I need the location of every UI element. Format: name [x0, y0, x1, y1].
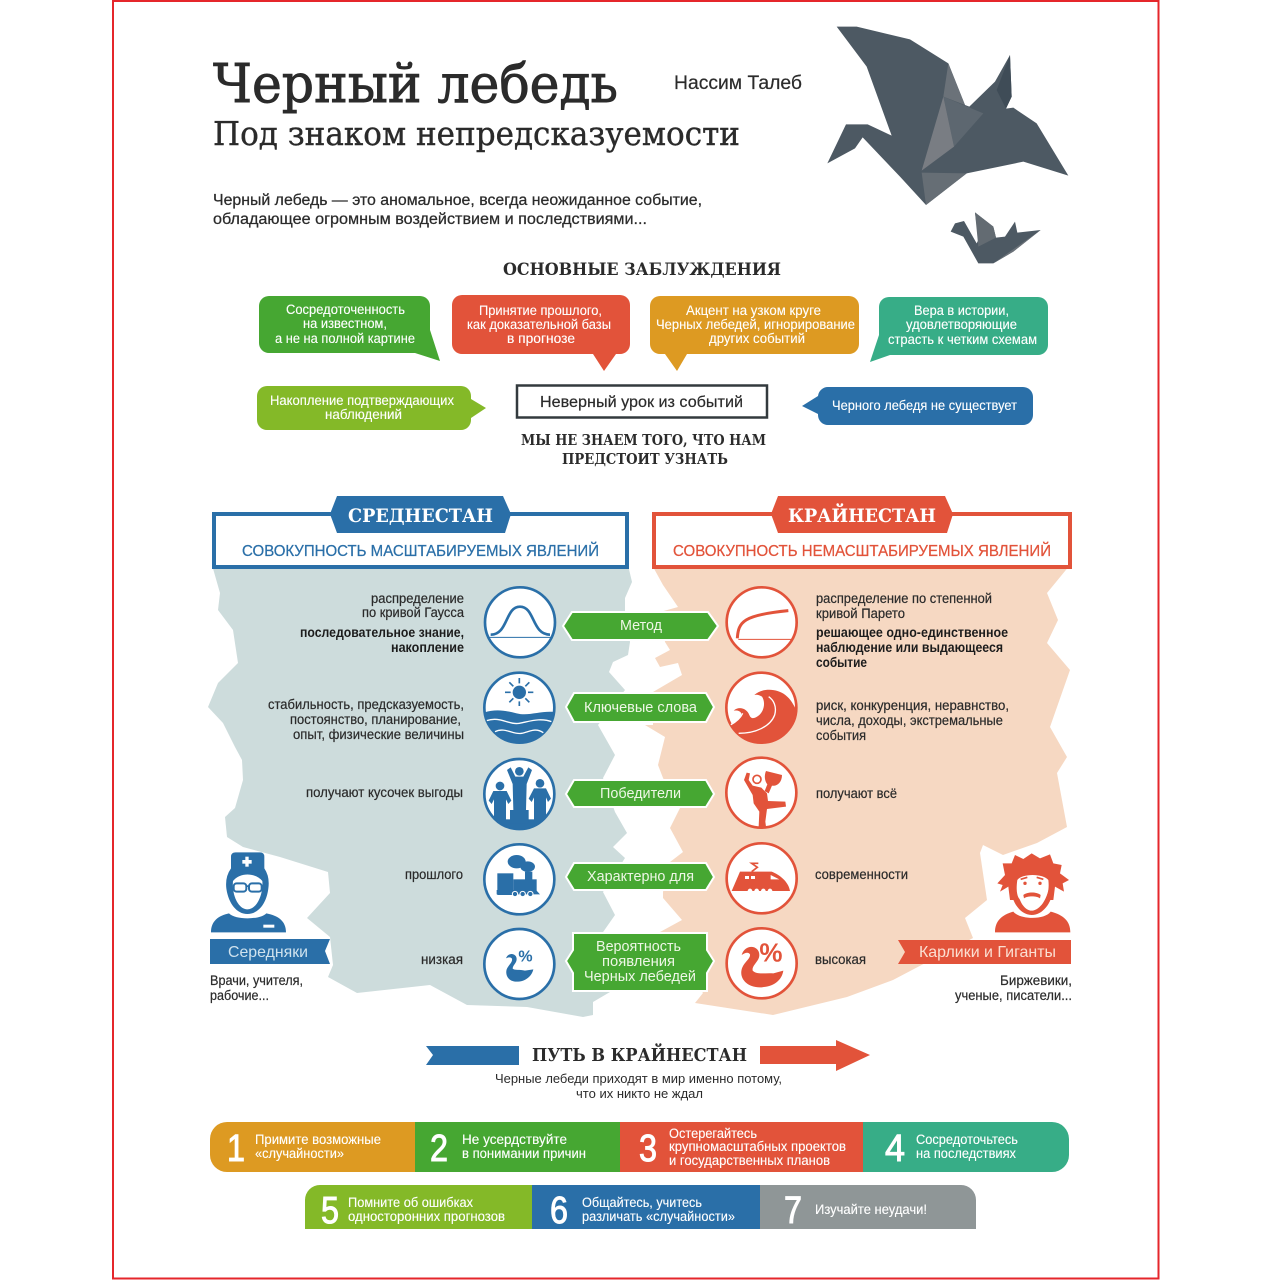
icon: steam locomotive: [484, 844, 554, 914]
callout: no black swan: Черного лебедя не существует: [832, 398, 1017, 413]
step 5: [321, 1190, 505, 1232]
bubble: known: а не на полной картине: [275, 331, 415, 346]
bubble: known: [259, 296, 440, 361]
icon: small swan percent: [484, 929, 554, 999]
callout: accumulation: наблюдений: [325, 407, 402, 422]
left column texts: по кривой Гаусса: [362, 605, 464, 620]
bubble: past: как доказательной базы: [467, 317, 611, 332]
right column texts: событие: [816, 655, 867, 670]
label: mediocre people: [210, 939, 330, 964]
left column texts: прошлого: [405, 867, 463, 882]
intro text: обладающее огромным воздействием и последствиями...: [213, 211, 647, 228]
bubble: stories: [870, 297, 1048, 362]
step 7: Изучайте неудачи!: [815, 1202, 927, 1217]
icon: big swan percent: [727, 928, 797, 998]
bubble: narrow circle: Акцент на узком круге: [686, 303, 821, 318]
step 5: 5: [321, 1190, 339, 1232]
step 1: Примите возможные: [255, 1132, 381, 1147]
step 2: Не усердствуйте: [462, 1132, 567, 1147]
bubble: past: Принятие прошлого,: [479, 303, 602, 318]
step 3: 3: [639, 1128, 657, 1170]
author: Нассим Талеб: [674, 73, 802, 94]
right column texts: числа, доходы, экстремальные: [816, 713, 1003, 728]
step 6: 6: [550, 1190, 568, 1232]
red icons: [722, 587, 799, 998]
panel header: Extremistan: СОВОКУПНОСТЬ НЕМАСШТАБИРУЕМЫХ ЯВЛЕНИЙ: [673, 542, 1051, 560]
title: Черный лебедь: [213, 54, 618, 115]
text: traders scientists: Биржевики,: [1000, 973, 1072, 988]
panel header: Extremistan: КРАЙНЕСТАН: [788, 503, 936, 527]
step 4: [885, 1128, 1018, 1170]
background blob: Mediocristan: [208, 565, 632, 1017]
intro text: Черный лебедь — это аномальное, всегда неожиданное событие,: [213, 192, 702, 209]
label: dwarfs and giants: [898, 940, 1071, 964]
path caption: что их никто не ждал: [576, 1086, 703, 1101]
callout: accumulation: Накопление подтверждающих: [270, 393, 454, 408]
title: [213, 54, 740, 153]
tag: keywords: [566, 693, 714, 722]
box: wrong lesson: Неверный урок из событий: [540, 394, 743, 411]
right column texts: наблюдение или выдающееся: [816, 640, 1003, 655]
icon: dancing winner with trophy: [726, 758, 796, 828]
tag: probability: [566, 933, 714, 991]
left column texts: распределение: [371, 591, 464, 606]
step 1: [227, 1128, 381, 1170]
icon: gauss curve: [485, 587, 555, 657]
icon: origami swans: [827, 27, 1068, 263]
bubble: stories: страсть к четким схемам: [888, 332, 1037, 347]
blue icons: [480, 587, 560, 999]
bubble: narrow circle: [650, 296, 859, 371]
icon: pareto curve: [727, 587, 797, 657]
tag: winners: Победители: [600, 785, 681, 802]
right column texts: события: [816, 728, 866, 743]
path caption: Черные лебеди приходят в мир именно потому,: [495, 1071, 782, 1086]
tag: keywords: Ключевые слова: [584, 699, 698, 716]
icon: big swan percent: %: [759, 938, 782, 968]
text: doctors teachers: рабочие...: [210, 988, 269, 1003]
icon: small swan percent: %: [518, 949, 533, 966]
bubble: known: Сосредоточенность: [286, 302, 405, 317]
right column texts: распределение по степенной: [816, 591, 992, 606]
step 4: Сосредоточьтесь: [916, 1132, 1018, 1147]
heading: path to Extremistan: ПУТЬ В КРАЙНЕСТАН: [532, 1042, 747, 1066]
box: wrong lesson: [517, 386, 767, 418]
panel header: Mediocristan: [214, 496, 627, 567]
step 3: [639, 1126, 846, 1170]
tag: probability: появления: [602, 953, 675, 970]
statement: ПРЕДСТОИТ УЗНАТЬ: [562, 451, 728, 468]
step 7: 7: [784, 1190, 802, 1232]
text: traders scientists: ученые, писатели...: [955, 988, 1072, 1003]
step 3: и государственных планов: [669, 1153, 830, 1168]
steps row 1: [210, 1122, 1069, 1172]
statement: [521, 432, 766, 468]
right column texts: высокая: [815, 952, 866, 967]
left column texts: постоянство, планирование,: [290, 712, 461, 727]
step 2: 2: [430, 1128, 448, 1170]
icon: calm sea and sun: [480, 673, 558, 747]
bubble: narrow circle: других событий: [709, 331, 805, 346]
step 2: [430, 1128, 586, 1170]
step 1: «случайности»: [255, 1146, 344, 1161]
step 3: Остерегайтесь: [669, 1126, 757, 1141]
tag: winners: [566, 780, 714, 807]
figure: wild-haired genius: [995, 853, 1070, 932]
left column texts: опыт, физические величины: [293, 727, 464, 742]
bubble: past: в прогнозе: [507, 331, 575, 346]
heading: misconceptions: ОСНОВНЫЕ ЗАБЛУЖДЕНИЯ: [503, 260, 781, 280]
right column texts: [815, 591, 1009, 967]
right column texts: современности: [815, 867, 908, 882]
tag: method: Метод: [620, 617, 662, 634]
callout: accumulation: [257, 386, 486, 430]
panel header: Mediocristan: СРЕДНЕСТАН: [348, 505, 493, 527]
step 5: односторонних прогнозов: [348, 1209, 505, 1224]
statement: МЫ НЕ ЗНАЕМ ТОГО, ЧТО НАМ: [521, 432, 766, 449]
icon: big wave: [722, 673, 799, 748]
step 6: [550, 1190, 735, 1232]
left column texts: накопление: [391, 640, 464, 655]
bubble: past: [452, 295, 630, 371]
left column texts: последовательное знание,: [300, 625, 464, 640]
steps row 2: [305, 1185, 976, 1232]
step 4: на последствиях: [916, 1146, 1016, 1161]
left column texts: низкая: [421, 952, 463, 967]
right column texts: кривой Парето: [816, 606, 905, 621]
bubble: stories: Вера в истории,: [914, 303, 1009, 318]
callout: no black swan: [802, 387, 1033, 425]
icon: three winners: [480, 759, 560, 833]
bubble: stories: удовлетворяющие: [906, 317, 1017, 332]
step 1: 1: [227, 1128, 245, 1170]
right column texts: получают всё: [816, 786, 897, 801]
left column texts: стабильность, предсказуемость,: [268, 697, 464, 712]
label: dwarfs and giants: Карлики и Гиганты: [919, 944, 1056, 961]
text: traders scientists: [955, 973, 1072, 1003]
step 7: [784, 1190, 927, 1232]
bubble: narrow circle: Черных лебедей, игнорирование: [656, 317, 855, 332]
label: mediocre people: Середняки: [228, 944, 308, 961]
intro text: [213, 192, 702, 228]
step 6: Общайтесь, учитесь: [582, 1195, 702, 1210]
bubble: known: на известном,: [303, 316, 387, 331]
left column texts: [268, 591, 464, 967]
icon: fast train: [727, 843, 797, 913]
tag: typical for: Характерно для: [587, 868, 694, 885]
text: doctors teachers: Врачи, учителя,: [210, 973, 303, 988]
step 5: Помните об ошибках: [348, 1195, 473, 1210]
step 3: крупномасштабных проектов: [669, 1139, 846, 1154]
tag: method: [563, 612, 718, 640]
step 2: в понимании причин: [462, 1146, 586, 1161]
panel header: Extremistan: [654, 496, 1070, 567]
step 6: различать «случайности»: [582, 1209, 735, 1224]
step 4: 4: [885, 1128, 905, 1170]
title: Под знаком непредсказуемости: [213, 114, 740, 153]
arrow: path end: [760, 1040, 870, 1071]
right column texts: риск, конкуренция, неравнство,: [816, 698, 1009, 713]
figure: doctor: [211, 852, 286, 932]
tag: probability: Черных лебедей: [584, 968, 696, 985]
tag: probability: Вероятность: [596, 938, 681, 955]
arrow: path start: [426, 1046, 519, 1065]
left column texts: получают кусочек выгоды: [306, 785, 463, 800]
background blob: Extremistan: [645, 565, 1070, 1015]
panel header: Mediocristan: СОВОКУПНОСТЬ МАСШТАБИРУЕМЫХ ЯВЛЕНИЙ: [242, 542, 599, 560]
tag: typical for: [566, 863, 714, 890]
path caption: [495, 1071, 782, 1101]
right column texts: решающее одно-единственное: [816, 625, 1008, 640]
text: doctors teachers: [210, 973, 303, 1003]
